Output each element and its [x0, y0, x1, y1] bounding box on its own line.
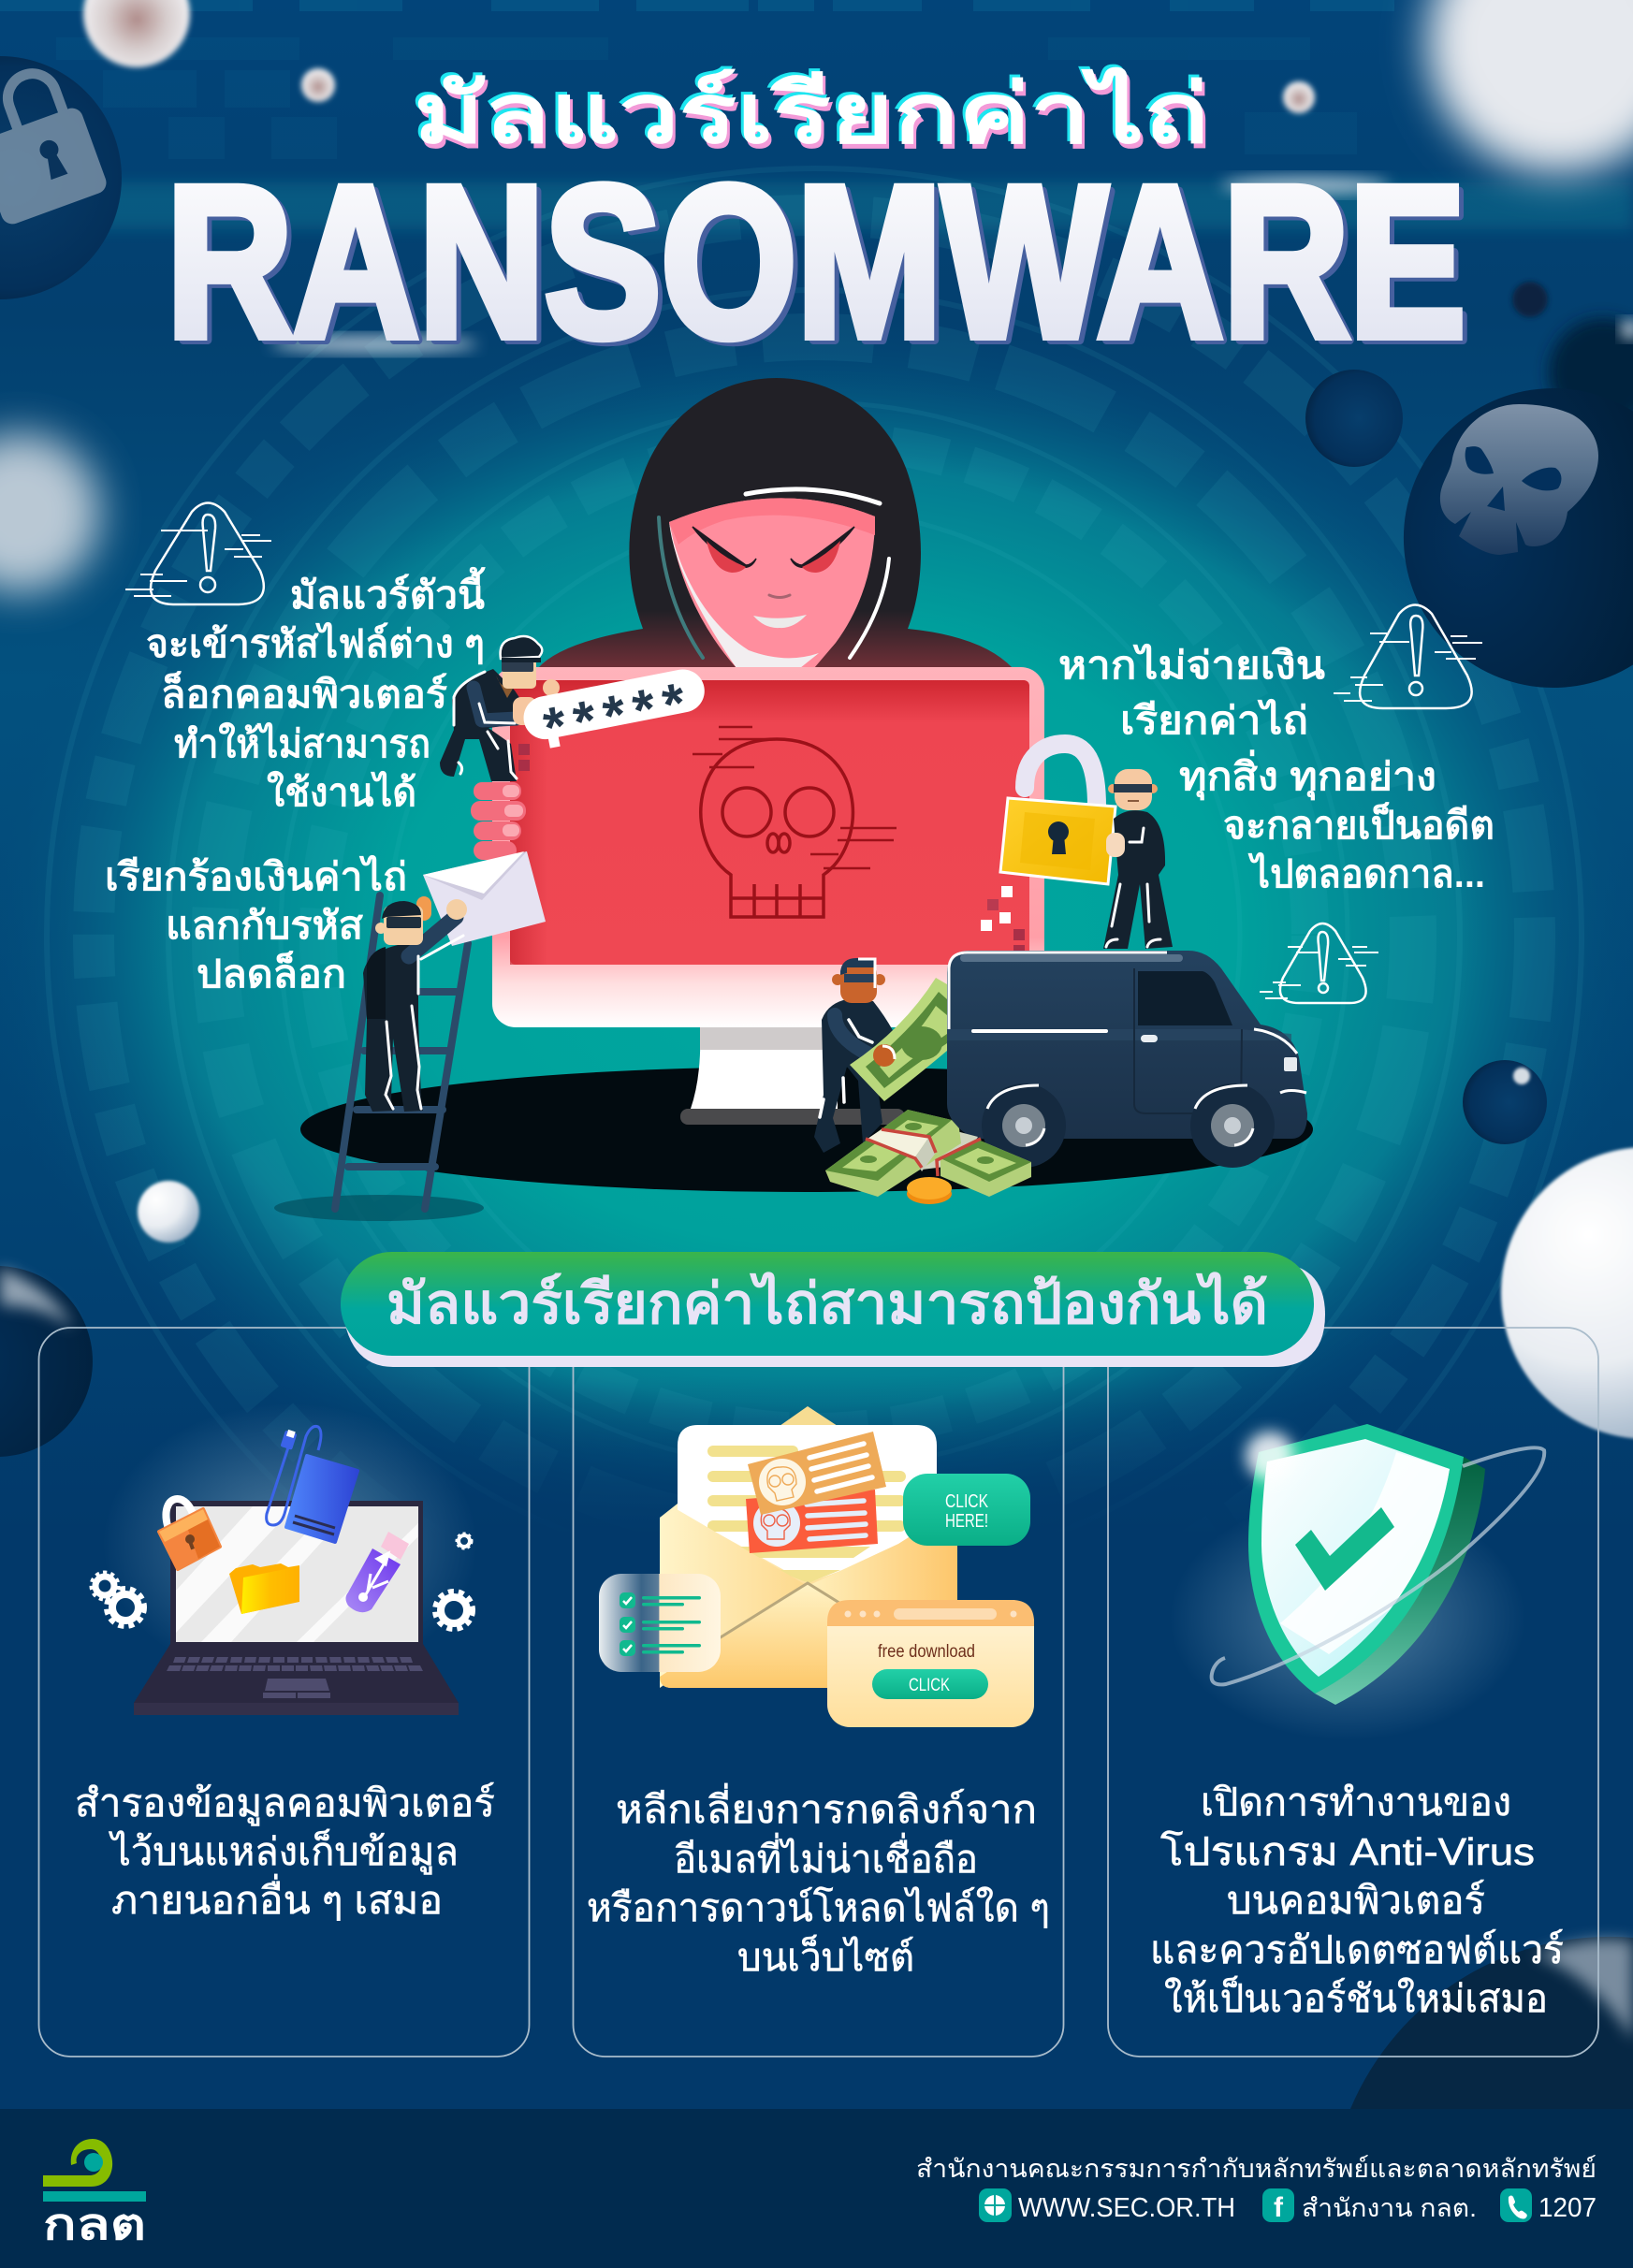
coin: [907, 1184, 952, 1204]
text: card 2: [587, 1783, 1050, 1979]
illustration: shield: [1170, 1424, 1544, 1740]
sphere: small dark: [1512, 282, 1548, 317]
sphere: lock: [0, 56, 122, 299]
monitor stand: [680, 1027, 905, 1125]
text: card 3: และควรอัปเดตซอฟต์แวร์: [1150, 1928, 1564, 1971]
logo: กลต: [43, 2200, 146, 2248]
sphere: bottom right dark: [1350, 1937, 1633, 2109]
hacker: [538, 378, 1013, 668]
sphere: dark left: [0, 1266, 93, 1457]
organisation name: สำนักงานคณะกรรมการกำกับหลักทรัพย์และตลาดหลักทรัพย์: [916, 2154, 1597, 2183]
banknote: [850, 978, 947, 1101]
text block: malware locks: ล็อกคอมพิวเตอร์: [161, 671, 447, 716]
click here button: CLICK: [945, 1491, 989, 1512]
laptop: usb: [346, 1532, 409, 1612]
illustration: phishing envelope: [599, 1406, 1034, 1727]
laptop: padlock: [159, 1499, 220, 1569]
text: card 3: ให้เป็นเวอร์ชันใหม่เสมอ: [1164, 1976, 1548, 2020]
skull on screen: [693, 727, 897, 917]
download window: CLICK: [909, 1676, 950, 1695]
text: card 3: โปรแกรม Anti-Virus: [1160, 1830, 1535, 1873]
contact: facebook: สำนักงาน กลต.: [1302, 2194, 1477, 2222]
text block: everything gone: จะกลายเป็นอดีต: [1223, 802, 1494, 847]
click here button: HERE!: [945, 1511, 988, 1532]
padlock: [1000, 744, 1115, 884]
panel: card 3 outline: [1108, 1328, 1598, 2057]
envelope held: [423, 851, 546, 946]
red malware card: [746, 1490, 878, 1553]
logo: [43, 2139, 146, 2248]
text: card 2: หลีกเลี่ยงการกดลิงก์จาก: [616, 1783, 1037, 1831]
title: Thai: มัลแวร์เรียกค่าไถ่: [411, 65, 1206, 157]
text: card 2: บนเว็บไซต์: [737, 1935, 914, 1979]
sphere: top-left pale: [83, 0, 190, 67]
hacker fingers: [471, 782, 526, 860]
text block: everything gone: ทุกสิ่ง ทุกอย่าง: [1179, 749, 1436, 801]
text: card 1: ไว้บนแหล่งเก็บข้อมูล: [109, 1829, 459, 1875]
text block: if not paid: [1058, 643, 1325, 742]
text: card 1: สำรองข้อมูลคอมพิวเตอร์: [75, 1781, 495, 1826]
laptop: gears: [92, 1534, 473, 1629]
contact: phone: [1500, 2188, 1597, 2223]
face: [669, 498, 875, 668]
text: card 3: [1150, 1781, 1564, 2020]
sphere: left blurred white: [0, 433, 100, 592]
sphere: small white: [138, 1181, 199, 1243]
monitor: [492, 667, 1044, 1125]
text block: ransom demand: เรียกร้องเงินค่าไถ่: [105, 854, 407, 898]
text block: malware locks: ใช้งานได้: [267, 770, 416, 814]
illustration: laptop: [92, 1403, 477, 1715]
text block: malware locks: ทำให้ไม่สามารถ: [174, 721, 430, 765]
sphere: dark mid: [1305, 370, 1403, 467]
text block: malware locks: มัลแวร์ตัวนี้: [290, 567, 487, 617]
contact: website: WWW.SEC.OR.TH: [1018, 2193, 1235, 2223]
floor shadow: [274, 1067, 1313, 1221]
text block: everything gone: [1179, 749, 1494, 895]
password pill: *****: [539, 669, 699, 760]
panel: card 1 outline: [39, 1328, 530, 2057]
sphere: dark right upper: [1549, 318, 1633, 427]
text: card 1: [75, 1781, 495, 1922]
download window: [827, 1600, 1034, 1727]
thief: money: [814, 958, 947, 1153]
sphere: skull: [1404, 388, 1633, 688]
title: Thai: มัลแวร์เรียกค่าไถ่: [416, 72, 1212, 165]
heading pill: มัลแวร์เรียกค่าไถ่สามารถป้องกันได้: [386, 1271, 1268, 1335]
text: card 2: หรือการดาวน์โหลดไฟล์ใด ๆ: [587, 1886, 1050, 1929]
laptop: folder: [229, 1563, 299, 1614]
text: card 3: บนคอมพิวเตอร์: [1227, 1879, 1485, 1922]
sphere: big white right: [1501, 1147, 1633, 1439]
sphere: top-right blurred: [1427, 0, 1633, 173]
warning icon: right lower: [1260, 923, 1378, 1003]
contact: facebook: f: [1274, 2192, 1284, 2223]
text block: ransom demand: [105, 854, 407, 996]
panel: card 2 outline: [573, 1328, 1063, 2057]
laptop: hard drive: [267, 1426, 357, 1542]
contact: phone: 1207: [1538, 2193, 1597, 2223]
text: card 1: ภายนอกอื่น ๆ เสมอ: [111, 1874, 443, 1922]
sphere: small right: [1283, 81, 1315, 113]
thief: password: [440, 636, 560, 781]
heading pill: [341, 1252, 1325, 1367]
orange malware card: [748, 1432, 886, 1515]
ladder: [335, 895, 468, 1209]
click here button: [903, 1474, 1030, 1546]
download window: free download: [878, 1642, 975, 1662]
van: [947, 951, 1307, 1168]
cash stacks and coin: [825, 1110, 1031, 1204]
thief: padlock: [1103, 769, 1173, 949]
sphere: dark ball right: [1463, 1060, 1547, 1144]
footer: [0, 2109, 1633, 2268]
text block: if not paid: เรียกค่าไถ่: [1120, 698, 1308, 742]
text: card 2: อีเมลที่ไม่น่าเชื่อถือ: [674, 1833, 978, 1881]
text block: malware locks: จะเข้ารหัสไฟล์ต่าง ๆ: [146, 621, 485, 665]
thief: ladder: [363, 896, 467, 1112]
title: Thai: มัลแวร์เรียกค่าไถ่: [414, 67, 1209, 160]
warning icon: right top: [1334, 604, 1482, 708]
sphere: small left: [301, 68, 335, 102]
text block: malware locks: [146, 567, 487, 814]
pixel squares: [518, 744, 1025, 951]
warning icon: left: [125, 503, 271, 604]
text: card 3: เปิดการทำงานของ: [1201, 1781, 1511, 1824]
checklist card: [599, 1574, 721, 1672]
text block: ransom demand: ปลดล็อก: [197, 951, 346, 996]
text block: ransom demand: แลกกับรหัส: [166, 904, 363, 947]
text block: if not paid: หากไม่จ่ายเงิน: [1058, 643, 1325, 687]
contact: facebook: [1262, 2188, 1477, 2223]
text block: everything gone: ไปตลอดกาล...: [1247, 851, 1485, 895]
